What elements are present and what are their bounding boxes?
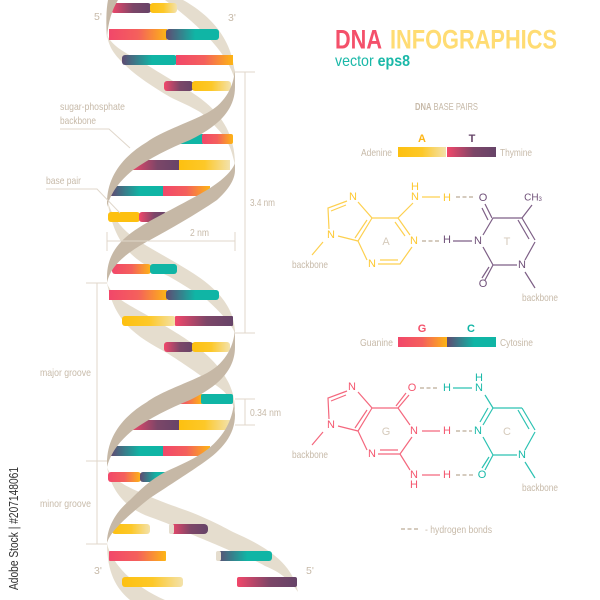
guanine: N xyxy=(327,419,335,431)
label: base pair xyxy=(46,175,120,213)
label: sugar-phosphate backbone: backbone xyxy=(60,115,96,127)
adenine-thymine structure xyxy=(312,181,543,290)
hydrogen bonds A-T xyxy=(422,197,473,241)
cytosine xyxy=(443,372,535,481)
cytosine: N xyxy=(518,449,526,461)
subtitle: vector eps8 xyxy=(335,53,410,70)
adenine: N xyxy=(410,235,418,247)
thymine: N xyxy=(518,259,526,271)
adenine: N xyxy=(368,258,376,270)
legend: hydrogen bonds xyxy=(401,524,492,536)
guanine-cytosine structure xyxy=(312,372,535,491)
thymine: T xyxy=(504,236,511,248)
dimension: grooves xyxy=(40,283,107,544)
backbone labels A-T: backbone xyxy=(522,292,558,304)
guanine: N xyxy=(348,381,356,393)
base pair bars xyxy=(108,3,297,587)
adenine: N xyxy=(327,229,335,241)
guanine xyxy=(312,381,451,491)
backbone labels A-T xyxy=(292,259,558,304)
dimension: 0.34 nm xyxy=(235,399,281,425)
G-C key bar: C xyxy=(467,323,475,335)
adenine: H xyxy=(411,181,419,193)
A-T key bar: Thymine xyxy=(500,147,532,159)
adenine: A xyxy=(382,236,390,248)
thymine: N xyxy=(474,235,482,247)
label: sugar-phosphate backbone xyxy=(60,101,130,148)
thymine: O xyxy=(479,278,488,290)
strand end labels: 5' xyxy=(94,11,102,23)
helix back strands xyxy=(107,0,298,600)
dimension: grooves: major groove xyxy=(40,367,91,379)
strand end labels xyxy=(94,11,314,577)
title xyxy=(335,24,557,54)
G-C key bar: G xyxy=(418,323,426,335)
heading: DNA base pairs: DNA BASE PAIRS xyxy=(415,101,478,113)
backbone labels G-C: backbone xyxy=(522,482,558,494)
guanine: N xyxy=(410,425,418,437)
cytosine: O xyxy=(478,469,487,481)
dimension: 3.4 nm xyxy=(235,72,275,333)
adenine xyxy=(312,181,451,270)
guanine: N xyxy=(410,469,418,481)
G-C key bar: Cytosine xyxy=(500,337,533,349)
dimension: 0.34 nm: 0.34 nm xyxy=(250,407,281,419)
backbone labels A-T: backbone xyxy=(292,259,328,271)
title: DNA xyxy=(335,24,382,54)
thymine: H xyxy=(443,234,451,246)
A-T key bar xyxy=(361,133,532,159)
guanine: N xyxy=(368,448,376,460)
A-T key bar: T xyxy=(469,133,476,145)
strand end labels: 3' xyxy=(94,565,102,577)
thymine: CH xyxy=(524,192,539,204)
label: base pair: base pair xyxy=(46,175,81,187)
backbone labels G-C: backbone xyxy=(292,449,328,461)
stock credit: Adobe Stock | #207148061 xyxy=(6,467,21,590)
guanine: G xyxy=(382,426,390,438)
backbone labels G-C xyxy=(292,449,558,494)
guanine: H xyxy=(443,425,451,437)
cytosine: H xyxy=(443,382,451,394)
G-C key bar xyxy=(360,323,533,349)
label: sugar-phosphate backbone: sugar-phosphate xyxy=(60,101,125,113)
dimension: 3.4 nm: 3.4 nm xyxy=(250,197,275,209)
strand end labels: 5' xyxy=(306,565,314,577)
G-C key bar: Guanine xyxy=(360,337,393,349)
A-T key bar: Adenine xyxy=(361,147,392,159)
thymine: 3 xyxy=(539,197,543,203)
cytosine: N xyxy=(475,382,483,394)
adenine: N xyxy=(349,191,357,203)
thymine xyxy=(443,192,543,290)
guanine: O xyxy=(408,382,417,394)
cytosine: N xyxy=(474,425,482,437)
title: INFOGRAPHICS xyxy=(390,24,557,54)
cytosine: C xyxy=(503,426,511,438)
dimension: 2 nm: 2 nm xyxy=(190,227,209,239)
A-T key bar: A xyxy=(418,133,426,145)
legend: hydrogen bonds: - hydrogen bonds xyxy=(425,524,492,536)
cytosine: H xyxy=(475,372,483,384)
dimension: grooves: minor groove xyxy=(40,498,91,510)
adenine: H xyxy=(443,192,451,204)
guanine: H xyxy=(410,479,418,491)
thymine: O xyxy=(479,192,488,204)
adenine: N xyxy=(411,191,419,203)
hydrogen bonds G-C xyxy=(420,388,473,475)
strand end labels: 3' xyxy=(228,12,236,24)
dimension: 2 nm xyxy=(107,227,235,251)
guanine: H xyxy=(443,469,451,481)
helix front strands xyxy=(106,0,235,543)
